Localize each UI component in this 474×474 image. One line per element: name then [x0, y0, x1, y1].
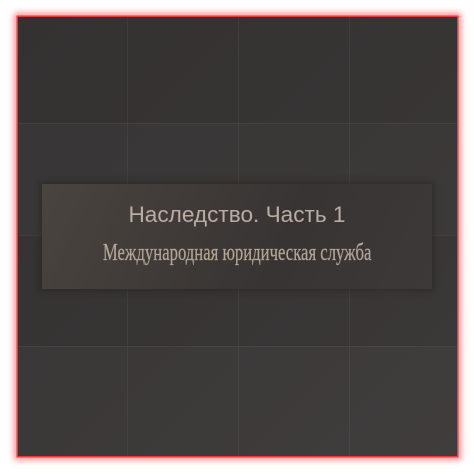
title panel: [42, 184, 432, 289]
heading: Наследство. Часть 1: [128, 202, 346, 227]
subtitle: Международная юридическая служба: [103, 240, 371, 266]
